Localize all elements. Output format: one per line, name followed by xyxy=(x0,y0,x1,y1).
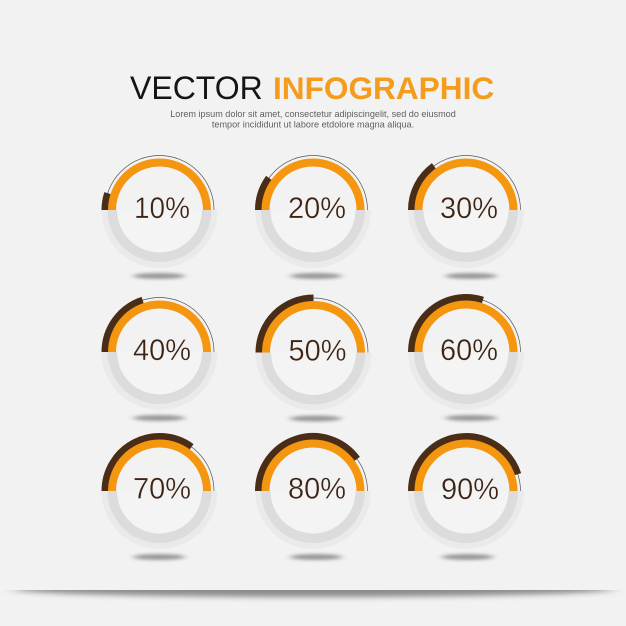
gauge: 60% xyxy=(408,298,524,421)
gauge: 90% xyxy=(408,437,524,560)
subtitle text: tempor incididunt ut labore etdolore magna aliqua. xyxy=(212,120,414,130)
gauge: 20%: 20% xyxy=(288,192,346,225)
title: INFOGRAPHIC xyxy=(273,70,494,106)
title: VECTOR xyxy=(130,70,263,106)
gauge: 80% xyxy=(255,437,371,560)
gauge: 10% xyxy=(102,156,218,279)
gauge: 10%: 10% xyxy=(134,192,190,225)
subtitle text xyxy=(170,109,456,130)
subtitle text: Lorem ipsum dolor sit amet, consectetur adipiscingelit, sed do eiusmod xyxy=(170,109,456,119)
gauge: 70%: 70% xyxy=(133,472,191,506)
gauge: 50% xyxy=(256,298,372,422)
gauge: 80%: 80% xyxy=(288,472,346,506)
gauge: 40% xyxy=(102,298,218,421)
gauge: 30%: 30% xyxy=(440,192,498,225)
gauge: 90%: 90% xyxy=(441,473,499,506)
gauge: 20% xyxy=(255,156,371,279)
gauge: 70% xyxy=(102,437,218,560)
gauge: 50%: 50% xyxy=(288,334,346,368)
gauge: 60%: 60% xyxy=(440,334,498,367)
gauge: 30% xyxy=(408,156,524,279)
gauge: 40%: 40% xyxy=(133,334,191,367)
bottom page shadow xyxy=(8,590,618,601)
